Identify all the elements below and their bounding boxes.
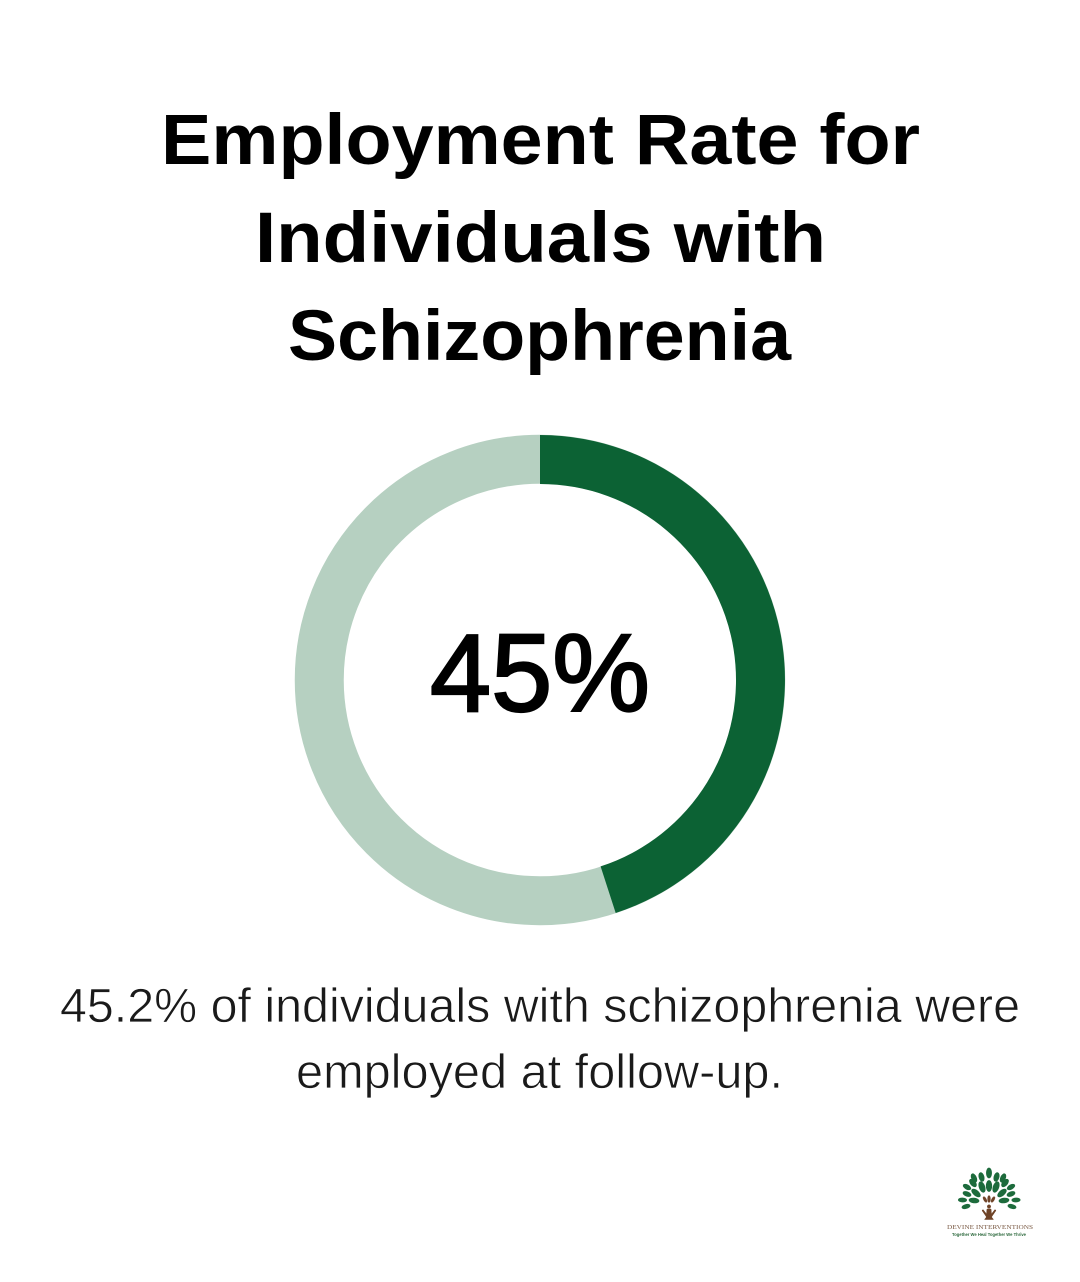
title: Individuals with [255, 199, 826, 278]
donut track [319, 459, 761, 901]
donut chart: 45% [319, 435, 785, 913]
title: Schizophrenia [288, 297, 792, 376]
icon: tree leaves [958, 1168, 1020, 1210]
description text [60, 980, 1020, 1099]
donut center value: 45% [430, 612, 650, 735]
logo name: DEVINE INTERVENTIONS [947, 1224, 1033, 1231]
logo tagline: Together We Heal Together We Thrive [952, 1232, 1026, 1238]
description text: 45.2% of individuals with schizophrenia were [60, 980, 1020, 1033]
description text: employed at follow-up. [296, 1046, 783, 1099]
donut value segment [540, 435, 785, 913]
title [161, 101, 920, 376]
logo: Devine Interventions [947, 1168, 1033, 1238]
icon: tree trunk and figure [982, 1196, 996, 1220]
title: Employment Rate for [161, 101, 920, 180]
